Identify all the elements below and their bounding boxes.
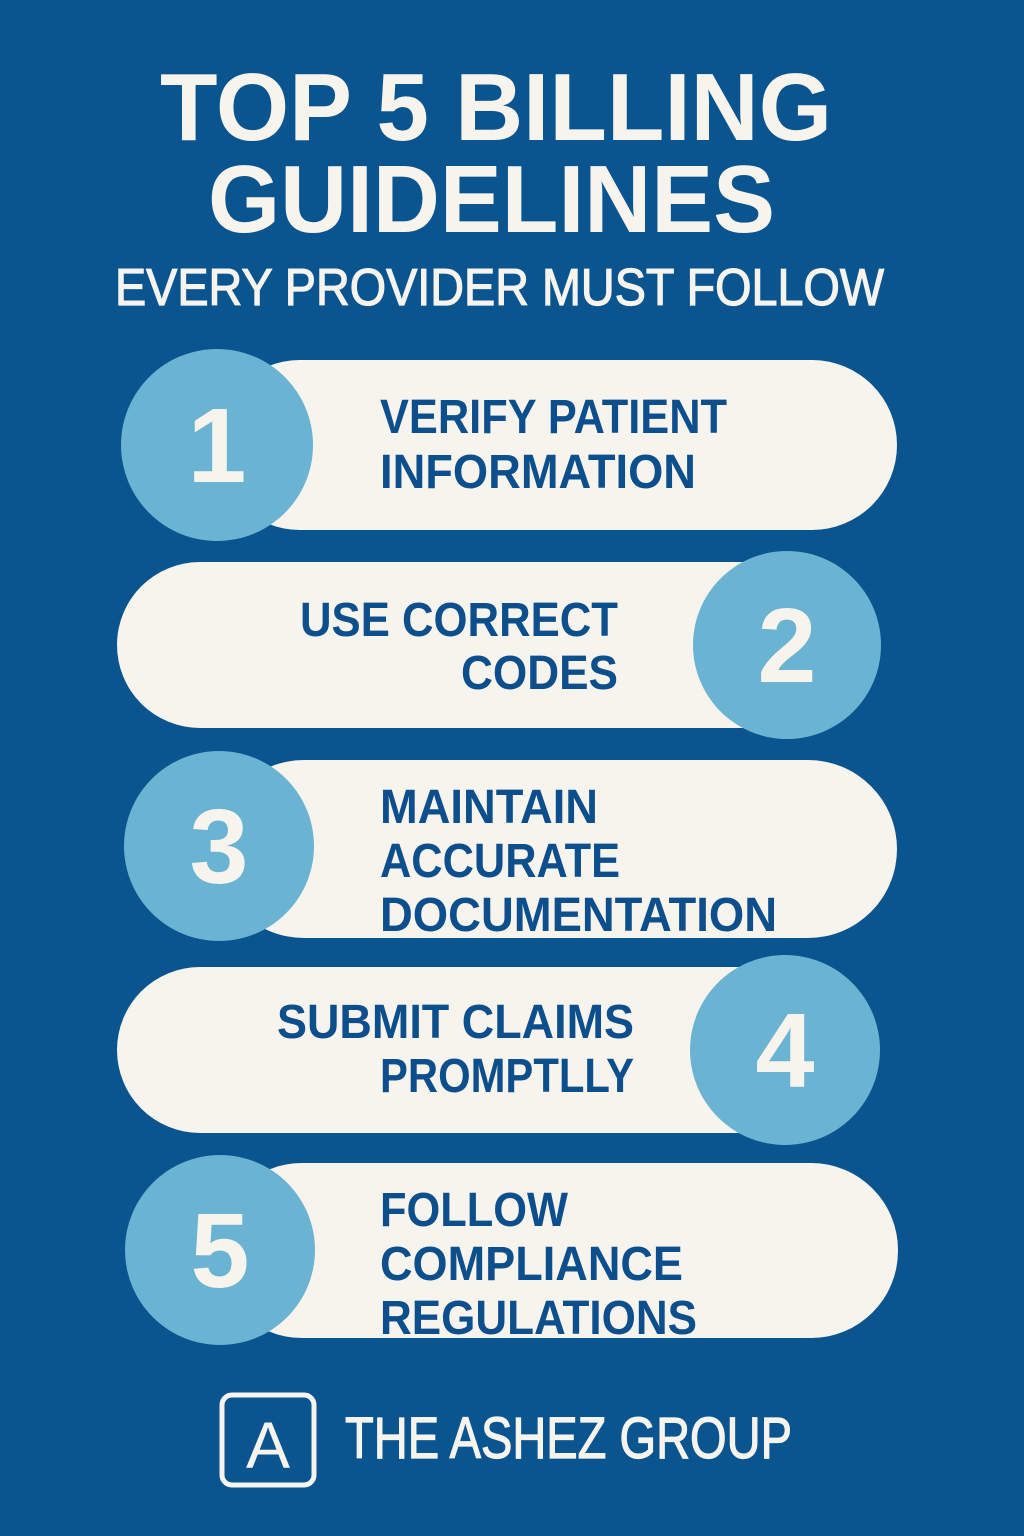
- panel: step 5: 5: [191, 1192, 249, 1310]
- panel: step 1: 1: [188, 387, 246, 505]
- logo: [222, 1395, 792, 1485]
- panel: step 4: PROMPTLLY: [380, 1050, 634, 1103]
- panel: step 1: [121, 349, 897, 541]
- panel: step 5: [125, 1155, 898, 1345]
- panel: step 4: 4: [756, 992, 815, 1110]
- panel: step 2: USE CORRECT: [300, 594, 618, 647]
- panel: step 1: INFORMATION: [380, 446, 696, 499]
- title: GUIDELINES: [208, 146, 775, 253]
- panel: step 5: REGULATIONS: [380, 1292, 697, 1345]
- panel: step 2: CODES: [461, 647, 618, 700]
- subtitle: EVERY PROVIDER MUST FOLLOW: [115, 259, 884, 317]
- icon: logo A box: A: [246, 1408, 290, 1482]
- panel: step 3: MAINTAIN: [380, 781, 598, 834]
- panel: step 3: 3: [190, 788, 248, 906]
- panel: step 1: VERIFY PATIENT: [380, 391, 727, 444]
- panel: step 3: ACCURATE: [380, 835, 620, 888]
- panel: step 4: [117, 955, 880, 1145]
- panel: step 2: 2: [758, 587, 816, 705]
- panel: step 3: [124, 751, 897, 942]
- title: TOP 5 BILLING: [160, 54, 832, 161]
- panel: step 5: COMPLIANCE: [380, 1238, 683, 1291]
- panel: step 4: SUBMIT CLAIMS: [277, 996, 634, 1049]
- panel: step 5: FOLLOW: [380, 1184, 569, 1237]
- panel: step 2: [117, 551, 881, 739]
- icon: logo A box: [222, 1395, 314, 1485]
- circle 1: [121, 349, 313, 541]
- logo: THE ASHEZ GROUP: [345, 1406, 792, 1471]
- title: [160, 54, 832, 253]
- panel: step 3: DOCUMENTATION: [380, 889, 777, 942]
